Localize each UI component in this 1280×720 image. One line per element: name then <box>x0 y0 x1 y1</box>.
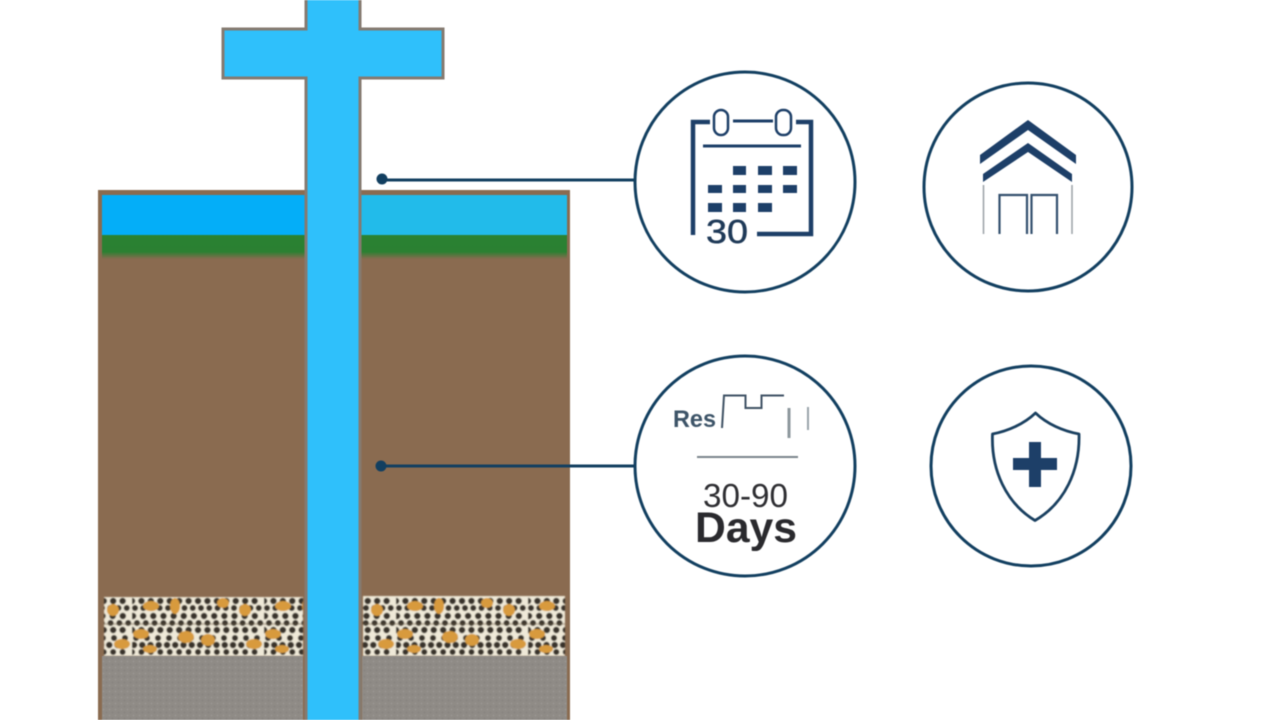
connector: lower <box>376 460 635 472</box>
medical cross <box>1013 442 1057 487</box>
layer: bedrock right <box>362 656 567 720</box>
upper roof <box>980 120 1076 164</box>
layer: gravel right <box>363 596 565 656</box>
soil frame <box>98 190 570 720</box>
small bars <box>788 408 790 438</box>
unit: Days <box>695 504 797 552</box>
layer: grass left <box>102 235 305 259</box>
icon: results 30-90 days <box>635 356 855 576</box>
panel: ground cross-section <box>98 190 570 720</box>
range value: 30-90 <box>703 477 788 514</box>
layer: water right <box>361 195 567 235</box>
well pipe with cross bar <box>223 0 443 720</box>
icon: calendar 30 days <box>635 72 855 292</box>
calendar rings <box>714 110 728 135</box>
icon: shield with cross <box>931 366 1131 566</box>
calendar number: 30 <box>706 213 748 250</box>
chart outline fragment <box>722 396 784 428</box>
layer: water left <box>102 195 305 235</box>
walls <box>984 185 1072 234</box>
icon: house <box>924 83 1132 291</box>
pipe and bar outline <box>223 0 443 720</box>
label: Res: Res <box>673 406 716 433</box>
lower roof <box>983 143 1072 182</box>
layer: gravel left <box>104 597 303 656</box>
connector: upper <box>376 174 634 184</box>
shield <box>992 413 1079 520</box>
doors <box>1000 195 1057 234</box>
divider <box>697 456 798 458</box>
calendar frame <box>693 122 811 235</box>
calendar day squares <box>708 166 797 212</box>
layer: grass right <box>361 235 567 259</box>
layer: bedrock left <box>102 656 303 720</box>
